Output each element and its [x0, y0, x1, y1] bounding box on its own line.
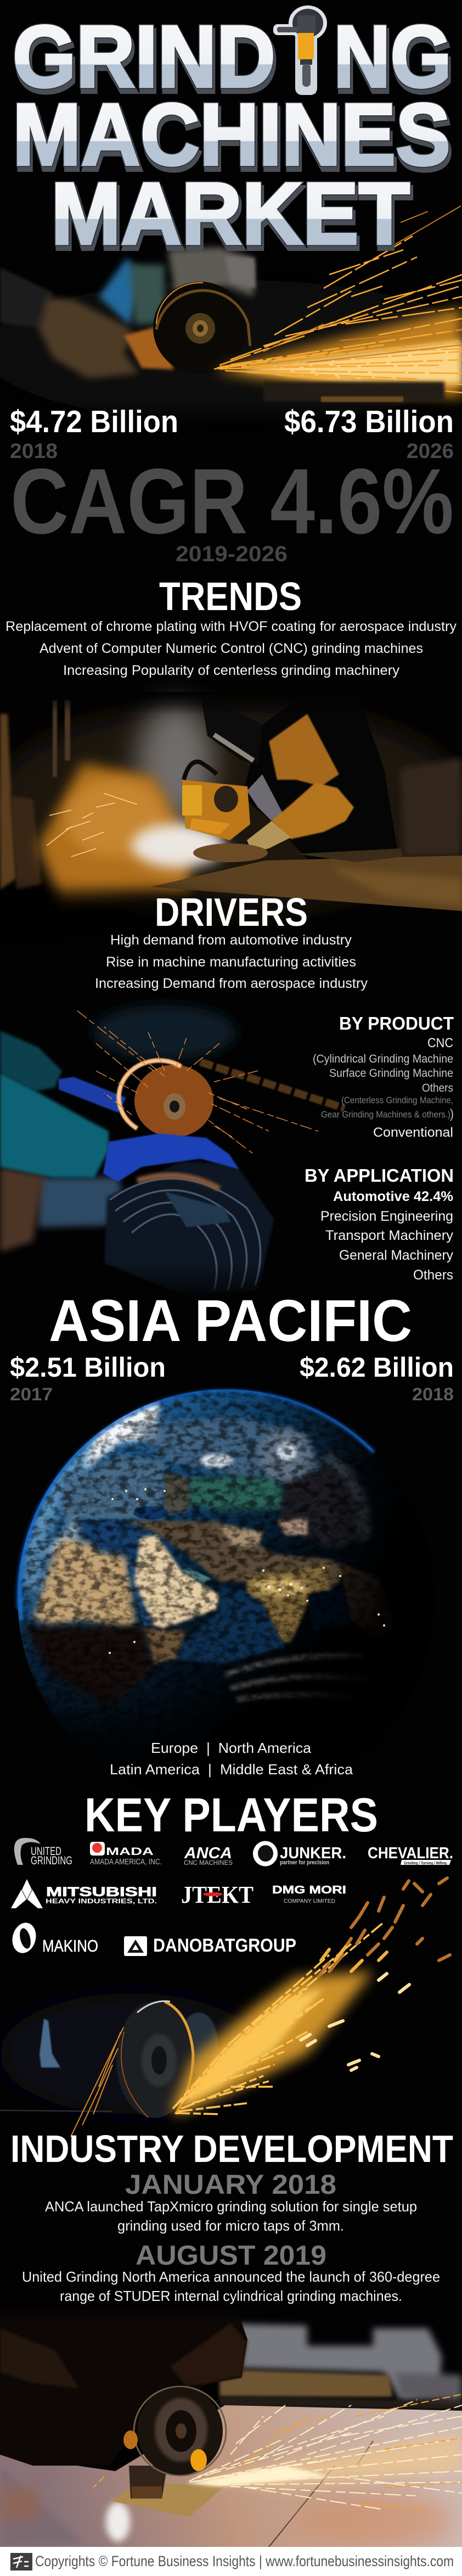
title line: GRINDING: I: [301, 12, 318, 110]
logo: dmg mori: DMG MORI: [272, 1884, 346, 1896]
globe: [14, 1387, 385, 1740]
logo: amada: AMADA AMERICA, INC.: [90, 1857, 162, 1867]
regional section: [10, 1287, 454, 1809]
by product list: (Cylindrical Grinding Machine: [313, 1053, 453, 1065]
other regions list: [110, 1740, 353, 1778]
footer copyright bar: [0, 2547, 462, 2576]
stat: 2017 value: $2.51 Billion: [10, 1352, 166, 1383]
stat: 2017 value: 2017: [10, 1384, 53, 1404]
milestone: january 2018: [45, 2169, 417, 2234]
logo: amada: [90, 1842, 162, 1867]
by application list: Transport Machinery: [325, 1228, 454, 1243]
industry development section: [10, 2127, 453, 2304]
drivers list: Increasing Demand from aerospace industry: [95, 976, 368, 991]
milestone: august 2019: AUGUST 2019: [136, 2240, 326, 2271]
milestone: january 2018: grinding used for micro taps of 3mm.: [117, 2217, 344, 2234]
stat: 2018 value: 2018: [10, 440, 58, 463]
logo: junker: JUNKER.: [280, 1845, 346, 1862]
logo: danobat group: DANOBATGROUP: [153, 1935, 296, 1956]
title: Grinding Machines Market: [13, 5, 453, 267]
by product list: BY PRODUCT: [339, 1013, 454, 1033]
logo: dmg mori: COMPANY LIMITED: [284, 1898, 335, 1904]
trend list: Advent of Computer Numeric Control (CNC) grinding machines: [40, 641, 423, 656]
by product list: Gear Grinding Machines & others.): [321, 1109, 450, 1120]
title line: GRINDING: GRIND: [13, 7, 275, 105]
by application list: BY APPLICATION: [305, 1165, 454, 1186]
trend list: Replacement of chrome plating with HVOF coating for aerospace industry: [5, 619, 457, 634]
stat: 2026 value: 2026: [407, 440, 454, 463]
market size stats: [10, 404, 454, 566]
title line: GRINDING: I: [299, 7, 317, 105]
title line: GRINDING: NG: [334, 7, 452, 105]
logo: jtekt: JTEKT: [181, 1881, 253, 1908]
logo: mitsubishi heavy industries: HEAVY INDUSTRIES, LTD.: [46, 1897, 157, 1905]
key players section: [9, 1789, 453, 1956]
icon: fortune business insights logo: [10, 2553, 32, 2571]
heading: trends: TRENDS: [159, 575, 302, 619]
photo: cutting disc with rising sparks: [0, 1878, 450, 2137]
title line: MARKET: MARKET: [51, 164, 410, 262]
heading: key players: KEY PLAYERS: [84, 1789, 378, 1842]
milestone: january 2018: JANUARY 2018: [125, 2169, 336, 2200]
photo: grinder cutting on workbench: [0, 2306, 462, 2548]
trend list: [5, 619, 457, 678]
other regions list: Europe | North America: [151, 1740, 312, 1756]
stat: 2026 value: [284, 404, 454, 463]
by application list: Automotive 42.4%: [333, 1189, 453, 1204]
milestone: august 2019: United Grinding North America announced the launch of 360-degree: [22, 2268, 440, 2285]
trends section: [5, 575, 457, 678]
segmentation text: [305, 1013, 454, 1283]
stat: 2018 value: $4.72 Billion: [10, 404, 178, 439]
by product list: [313, 1013, 454, 1140]
milestone: august 2019: [22, 2240, 440, 2304]
logo: makino: MAKINO: [42, 1936, 98, 1955]
stat: CAGR: 2019-2026: [176, 542, 288, 566]
other regions list: Latin America | Middle East & Africa: [110, 1761, 353, 1778]
logo: junker: partner for precision: [280, 1859, 329, 1866]
logo: chevalier: CHEVALIER.: [368, 1845, 453, 1862]
by application list: Precision Engineering: [320, 1209, 453, 1224]
stat: 2018 value: [10, 404, 178, 463]
logo: junker: [253, 1841, 346, 1866]
stat: 2018 value: [300, 1352, 454, 1404]
by product list: Surface Grinding Machine: [329, 1067, 453, 1080]
logo: mitsubishi heavy industries: [11, 1879, 157, 1908]
heading: drivers: DRIVERS: [155, 891, 308, 935]
logo: anca: ANCA: [184, 1845, 232, 1862]
logo: amada: MADA: [106, 1846, 154, 1858]
by application list: Others: [413, 1267, 453, 1283]
drivers list: High demand from automotive industry: [110, 932, 352, 948]
drivers list: Rise in machine manufacturing activities: [106, 954, 356, 970]
stat: 2018 value: 2018: [412, 1384, 454, 1404]
logo: anca: CNC MACHINES: [184, 1859, 233, 1867]
by product list: Conventional: [373, 1125, 453, 1140]
icon: angle grinder replacing the letter I: [273, 5, 327, 95]
logo: mitsubishi heavy industries: MITSUBISHI: [46, 1885, 157, 1899]
title line: MARKET: MARKET: [53, 169, 412, 267]
stat: 2026 value: $6.73 Billion: [284, 404, 454, 439]
logo: makino: [9, 1920, 98, 1955]
by product list: ): [450, 1107, 454, 1121]
title line: GRINDING: NG: [334, 7, 452, 105]
milestone: january 2018: ANCA launched TapXmicro grinding solution for single setup: [45, 2198, 417, 2215]
title line: GRINDING: I: [299, 7, 317, 105]
by product list: Others: [422, 1082, 453, 1094]
trend list: Increasing Popularity of centerless grinding machinery: [63, 663, 400, 678]
logo: dmg mori: [272, 1884, 346, 1904]
logo: united grinding: GRINDING: [31, 1854, 72, 1867]
stat: 2017 value: [10, 1352, 166, 1404]
photo: gloved hands grinding pipe: [0, 1005, 462, 1301]
logo: united grinding: UNITED: [31, 1845, 61, 1858]
heading: asia pacific: ASIA PACIFIC: [49, 1287, 412, 1354]
milestone: august 2019: range of STUDER internal cylindrical grinding machines.: [60, 2288, 402, 2304]
title line: GRINDING: GRIND: [13, 7, 275, 105]
by product list: CNC: [427, 1036, 453, 1050]
logo: chevalier: Grinding / Turning / Milling: [404, 1862, 447, 1865]
by application list: [305, 1165, 454, 1283]
title line: MARKET: MARKET: [51, 164, 410, 262]
drivers section: [95, 891, 368, 991]
title line: GRINDING: GRIND: [14, 12, 277, 110]
logo: united grinding: [14, 1838, 72, 1867]
title line: GRINDING: [13, 7, 453, 110]
photo: welder using grinder: [0, 692, 462, 934]
stat: 2018 value: $2.62 Billion: [300, 1352, 454, 1383]
photo: angle grinder with sparks: [0, 206, 462, 426]
by application list: General Machinery: [339, 1248, 453, 1263]
drivers list: [95, 932, 368, 991]
